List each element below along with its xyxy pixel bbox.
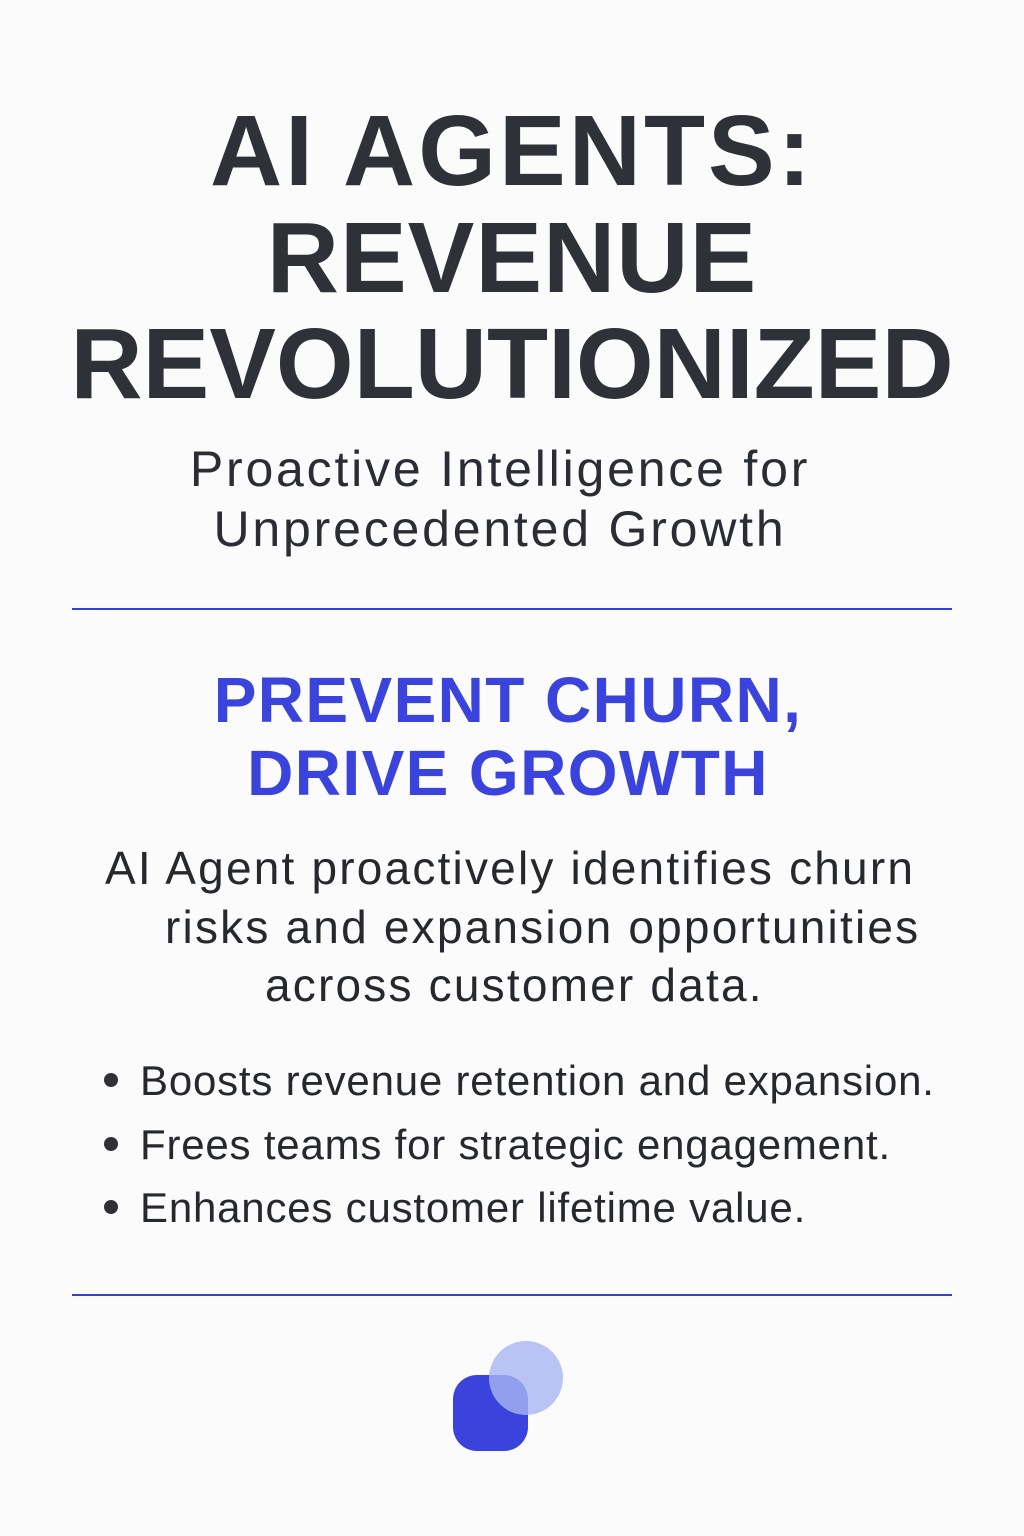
subtitle: Unprecedented Growth — [214, 501, 786, 557]
bullet list: Frees teams for strategic engagement. — [140, 1121, 891, 1168]
icon: logo — [453, 1341, 563, 1451]
title: REVOLUTIONIZED — [70, 308, 954, 420]
bullet list — [104, 1057, 935, 1231]
title: REVENUE — [267, 202, 757, 314]
description paragraph: AI Agent proactively identifies churn — [105, 842, 915, 894]
title — [70, 95, 954, 420]
section heading: DRIVE GROWTH — [247, 737, 769, 809]
bullet list: Enhances customer lifetime value. — [140, 1184, 806, 1231]
title: AI AGENTS: — [210, 95, 814, 207]
subtitle: Proactive Intelligence for — [190, 441, 810, 497]
description paragraph: risks and expansion opportunities — [165, 901, 920, 953]
section heading: PREVENT CHURN, — [214, 664, 802, 736]
description paragraph — [105, 842, 920, 1011]
description paragraph: across customer data. — [265, 959, 764, 1011]
bullet list: Boosts revenue retention and expansion. — [140, 1057, 935, 1104]
section heading — [214, 664, 802, 809]
subtitle — [190, 441, 810, 557]
